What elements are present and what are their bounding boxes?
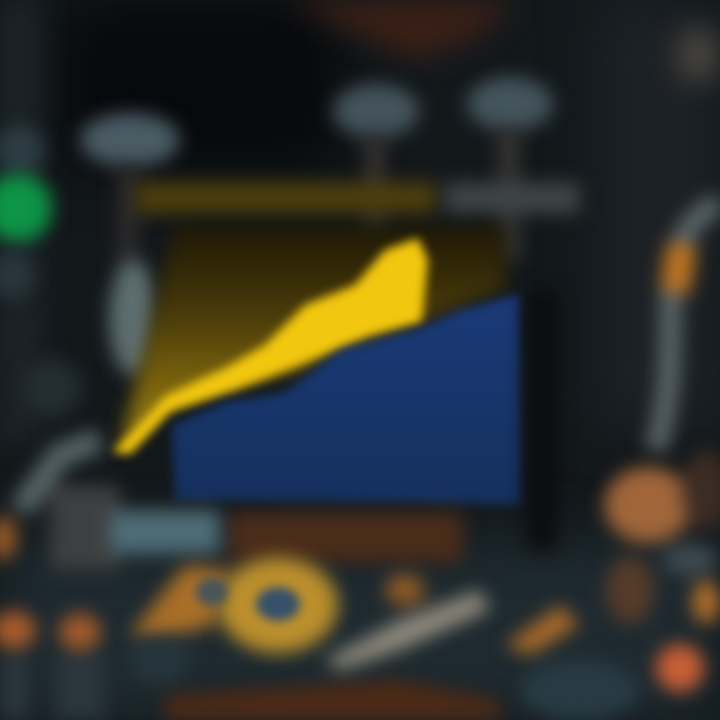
- right curved pipe: [655, 204, 720, 450]
- gold coins: [130, 557, 338, 653]
- bottom right orange blocks: [505, 450, 720, 720]
- lamp posts: [22, 77, 553, 418]
- top brown shape: [285, 0, 515, 60]
- chart: yellow area series: [112, 238, 428, 454]
- brown base under chart: [228, 512, 463, 562]
- chart header bar: [135, 182, 580, 214]
- bottom centre shapes: [165, 574, 500, 720]
- green glow icon: [0, 126, 52, 299]
- bottom left orange tokens: [0, 611, 190, 720]
- top right blob: [676, 27, 720, 83]
- chart: blue area series: [172, 294, 522, 505]
- dark post right of chart: [527, 290, 557, 550]
- chart: gold backdrop: [120, 225, 505, 450]
- left pipes and machinery: [0, 440, 220, 570]
